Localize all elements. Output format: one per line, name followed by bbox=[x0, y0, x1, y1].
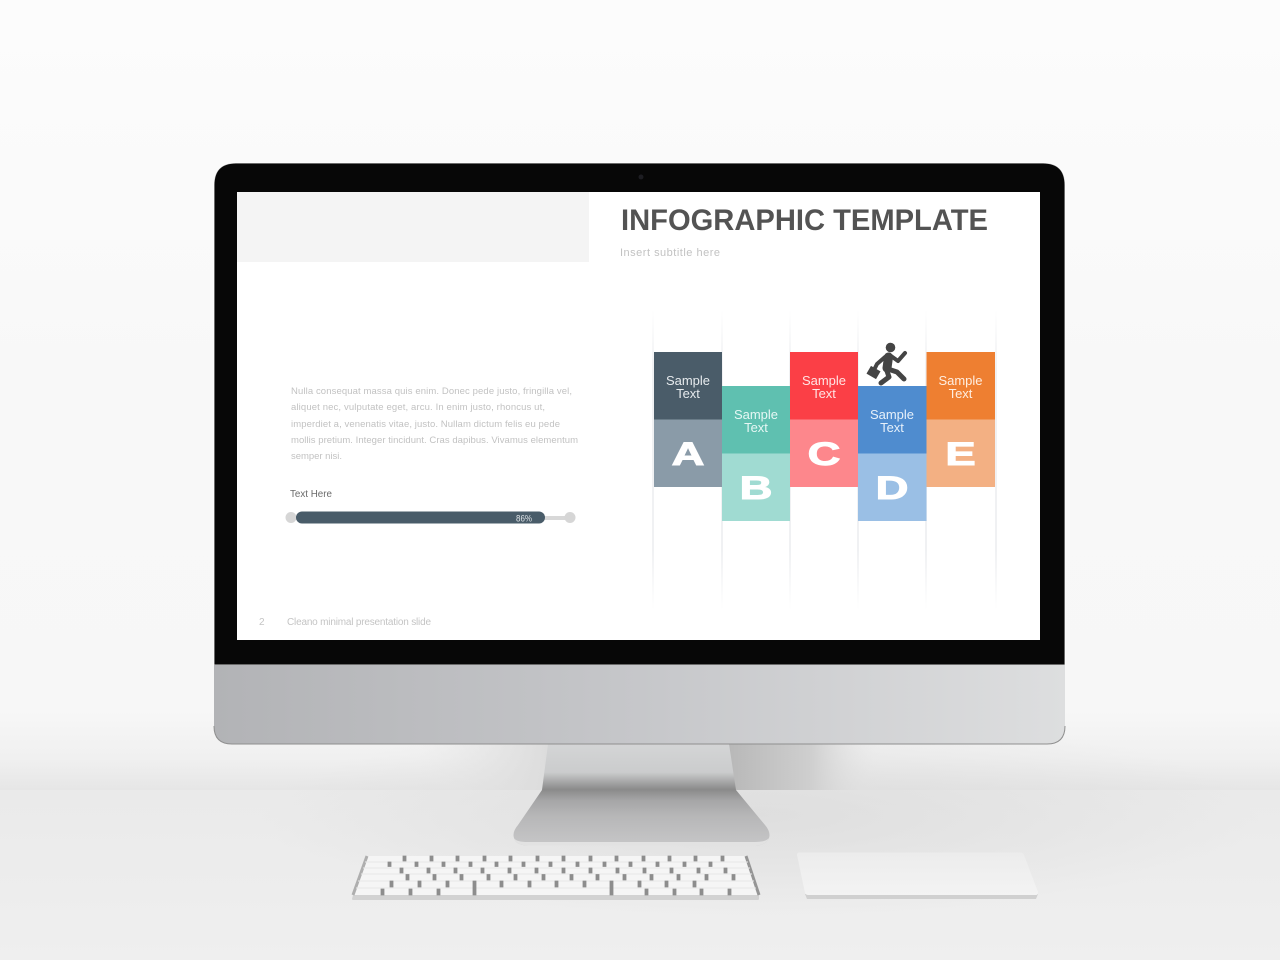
keyboard base bbox=[352, 895, 759, 900]
progress bar bbox=[286, 512, 576, 524]
monitor chin bbox=[214, 665, 1065, 744]
chart column E: Text bbox=[949, 386, 973, 401]
webcam bbox=[638, 174, 644, 180]
grey header block bbox=[237, 192, 589, 262]
footer page number: 2 bbox=[259, 617, 265, 628]
title: INFOGRAPHIC TEMPLATE bbox=[621, 204, 988, 237]
chart column D bbox=[858, 386, 926, 521]
paragraph text: imperdiet a, venenatis vitae, justo. Nullam dictum felis eu pede bbox=[291, 419, 560, 430]
trackpad bbox=[797, 852, 1038, 899]
progress bar: 86% bbox=[516, 514, 532, 524]
icon: running businessman bbox=[866, 343, 905, 383]
chart column D: D bbox=[876, 471, 908, 506]
chart column D: Text bbox=[880, 420, 904, 435]
chart column A: Text bbox=[676, 386, 700, 401]
monitor stand bbox=[514, 744, 770, 846]
monitor bezel bbox=[214, 163, 1065, 665]
chart column D: Sample bbox=[870, 407, 914, 422]
footer text: Cleano minimal presentation slide bbox=[287, 617, 431, 628]
paragraph text: mollis pretium. Integer tincidunt. Cras dapibus. Vivamus elementum bbox=[291, 435, 578, 446]
paragraph text: aliquet nec, vulputate eget, arcu. In enim justo, rhoncus ut, bbox=[291, 402, 545, 413]
chart column C: Text bbox=[812, 386, 836, 401]
background: desk surface bbox=[0, 790, 1280, 960]
chart column C: C bbox=[808, 437, 840, 472]
keyboard bbox=[352, 856, 759, 900]
chart column A bbox=[654, 352, 722, 487]
chart column A: A bbox=[672, 437, 704, 472]
monitor bbox=[214, 163, 1065, 744]
chart column B bbox=[722, 386, 790, 521]
progress label: Text Here bbox=[290, 488, 332, 500]
desk shading bbox=[260, 715, 1260, 915]
paragraph text: semper nisi. bbox=[291, 451, 342, 462]
chart column E: E bbox=[945, 437, 976, 472]
column guide lines bbox=[652, 310, 997, 610]
key gaps bbox=[381, 856, 735, 895]
paragraph text: Nulla consequat massa quis enim. Donec pede justo, fringilla vel, bbox=[291, 386, 572, 397]
chart column E: Sample bbox=[938, 373, 983, 388]
screen bbox=[237, 192, 1040, 640]
keyboard keys surface bbox=[353, 856, 759, 895]
chart column B: Sample bbox=[734, 407, 778, 422]
paragraph text bbox=[291, 386, 578, 462]
shadow left of stand bbox=[420, 744, 548, 790]
chin lower rim bbox=[214, 726, 1065, 744]
chart column A: Sample bbox=[666, 373, 710, 388]
chart column B: B bbox=[740, 471, 772, 506]
subtitle: Insert subtitle here bbox=[620, 247, 720, 259]
chart column E bbox=[926, 352, 995, 487]
chart column C: Sample bbox=[802, 373, 846, 388]
shadow right of stand bbox=[729, 744, 879, 790]
chart column B: Text bbox=[744, 420, 768, 435]
chart column C bbox=[790, 352, 858, 487]
